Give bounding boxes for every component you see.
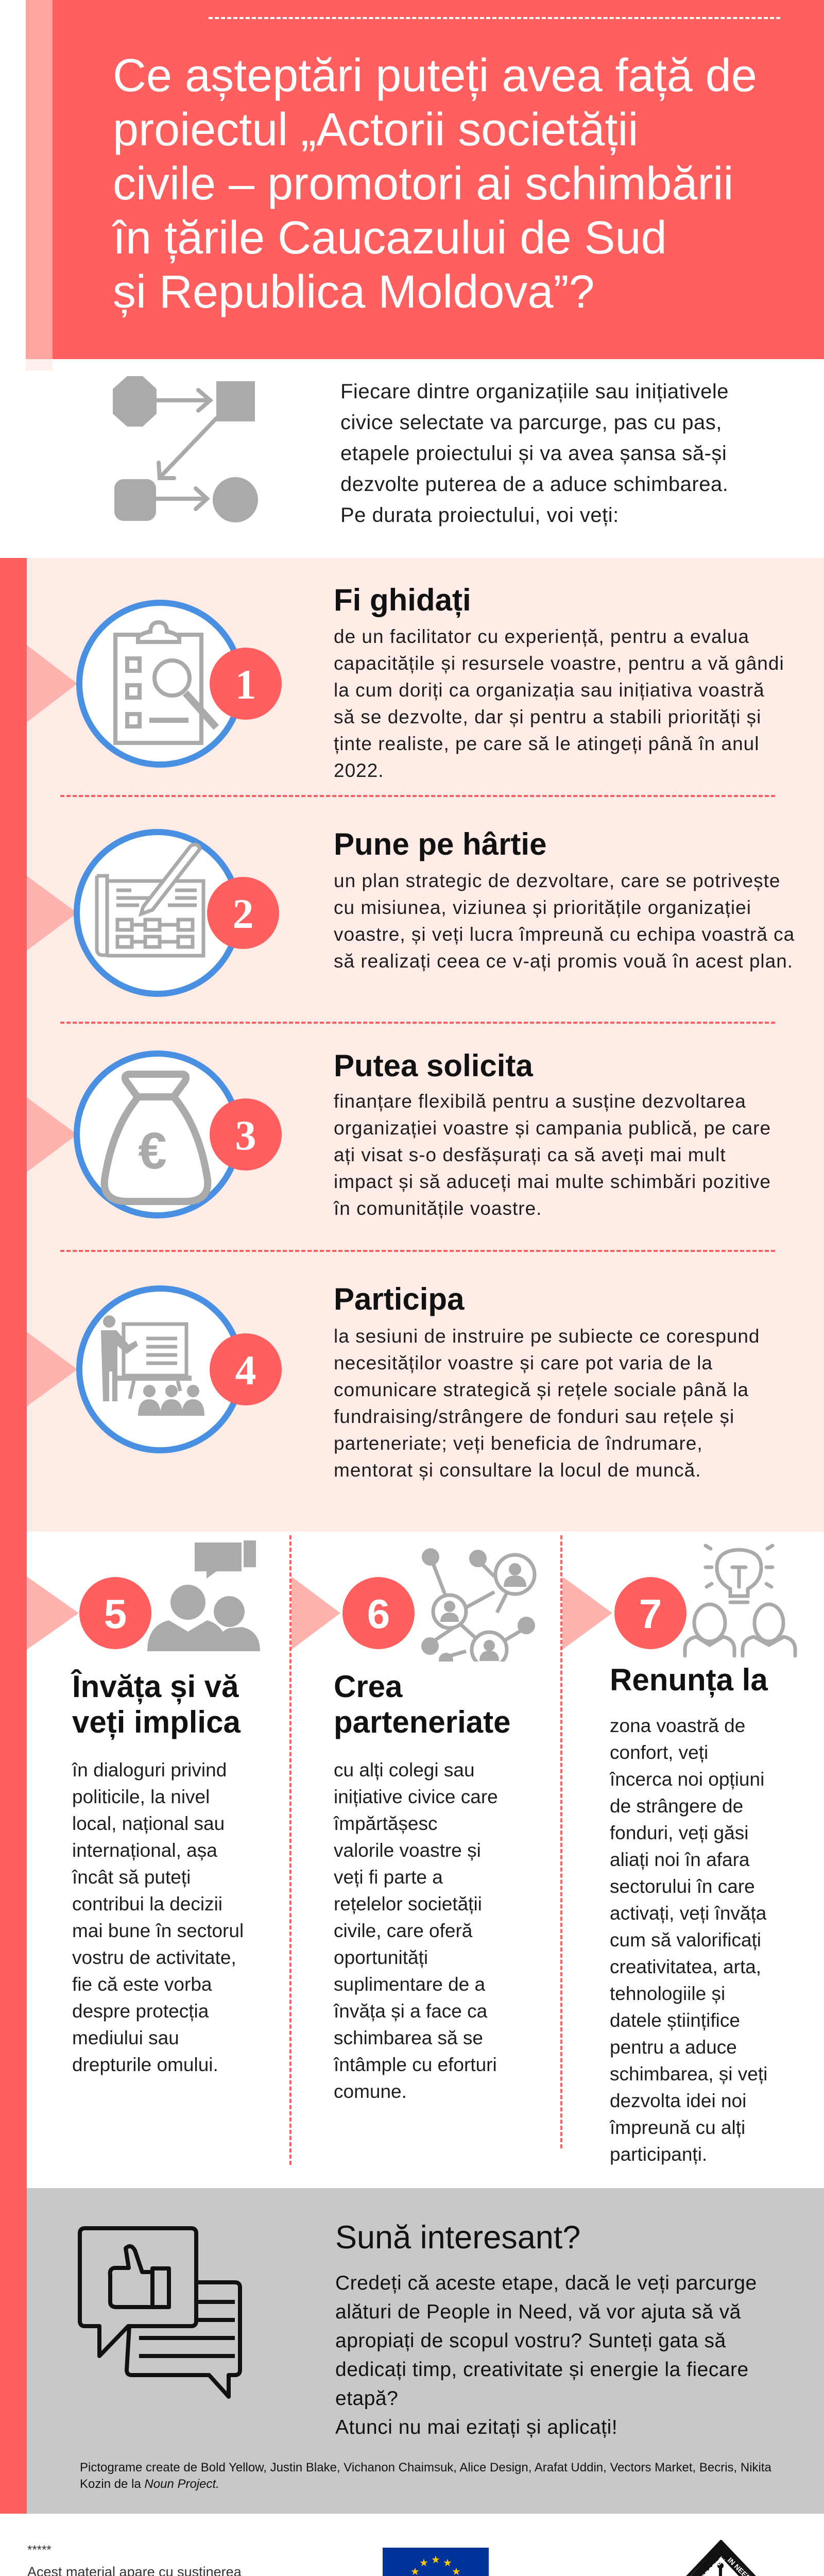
step 2 text: un plan strategic de dezvoltare, care se potrivește — [334, 870, 781, 891]
column 5 title: veți implica — [72, 1705, 241, 1739]
cta heading: Sună interesant? — [335, 2219, 580, 2256]
icon: presenter training — [27, 1285, 282, 1453]
column 6 title: Crea — [334, 1669, 402, 1704]
footer disclaimer: ***** — [27, 2543, 52, 2557]
step 4 — [27, 1282, 760, 1481]
step 3 text: organizației voastre și campania publică, pe care — [334, 1117, 771, 1139]
step 1 text: capacitățile și resursele voastre, pentru a vă gândi — [334, 653, 784, 674]
icon credits: Kozin de la Noun Project. — [80, 2477, 219, 2491]
step 2 title: Pune pe hârtie — [334, 827, 546, 861]
column 5 text: politicile, la nivel — [72, 1786, 210, 1807]
step 1 text: 2022. — [334, 760, 384, 781]
step 4 text: parteneriate; veți beneficia de îndrumare, — [334, 1433, 703, 1454]
column 7 text: activați, veți învăța — [610, 1903, 766, 1924]
step 4 text: comunicare strategică și rețele sociale până la — [334, 1379, 749, 1400]
column 6 text: cu alți colegi sau — [334, 1759, 475, 1781]
step 4 text: fundraising/strângere de fonduri sau rețele și — [334, 1406, 734, 1427]
column 7 text: cum să valorificați — [610, 1929, 761, 1951]
column 7 text — [609, 1715, 767, 2165]
column 6 text: întâmple cu eforturi — [334, 2054, 497, 2075]
icon: presenter training: 4 — [235, 1347, 256, 1394]
cta text: Atunci nu mai ezitați și aplicați! — [335, 2416, 617, 2438]
column dividers — [289, 1535, 291, 2165]
step 1 text — [334, 626, 784, 781]
title: în țările Caucazului de Sud — [113, 212, 667, 264]
column 7 text: de strângere de — [610, 1795, 743, 1817]
column 5 text: despre protecția — [72, 2001, 209, 2022]
column 6 text — [333, 1759, 498, 2102]
column 6 text: comune. — [334, 2081, 407, 2102]
cta text: alături de People in Need, vă vor ajuta să vă — [335, 2301, 741, 2323]
header dashed line — [209, 17, 780, 19]
column 5 — [27, 1540, 260, 2075]
intro text: etapele proiectului și va avea șansa să-și — [340, 442, 727, 465]
intro text: civice selectate va parcurge, pas cu pas, — [340, 411, 722, 434]
column 6 text: schimbarea să se — [334, 2027, 483, 2048]
intro text: Pe durata proiectului, voi veți: — [340, 504, 619, 527]
cta text: Credeți că aceste etape, dacă le veți parcurge — [335, 2272, 757, 2294]
logo: People in Need — [686, 2540, 756, 2576]
step 1 text: de un facilitator cu experiență, pentru a evalua — [334, 626, 749, 647]
step 3 — [27, 1048, 771, 1219]
title — [112, 50, 757, 318]
column 7 text: schimbarea, și veți — [610, 2063, 767, 2084]
title: și Republica Moldova”? — [113, 266, 594, 318]
step 3 text — [333, 1091, 771, 1219]
intro text: Fiecare dintre organizațiile sau inițiativele — [340, 380, 729, 403]
column 7 text: încerca noi opțiuni — [610, 1769, 764, 1790]
icon: clipboard with magnifier — [27, 600, 282, 768]
header red block — [53, 0, 824, 359]
column 6 text: civile, care oferă — [334, 1920, 472, 1941]
logo: EU flag — [383, 2548, 489, 2576]
column 7 text: participanți. — [610, 2144, 707, 2165]
column 5 title: Învăța și vă — [72, 1669, 239, 1704]
icon: clipboard with magnifier: 1 — [235, 661, 256, 708]
icon: money bag euro — [27, 1050, 282, 1218]
cta text: apropiați de scopul vostru? Sunteți gata să — [335, 2330, 726, 2352]
column 7 text: aliați noi în afara — [610, 1849, 750, 1870]
step 2 — [27, 827, 795, 997]
intro section — [113, 376, 729, 527]
step 4 text — [334, 1326, 760, 1481]
column 6 text: inițiative civice care — [334, 1786, 498, 1807]
column 6 text: valorile voastre și — [334, 1840, 481, 1861]
logo: EU flag: ★ — [443, 2556, 452, 2569]
column 6 title — [334, 1669, 510, 1739]
cta text: dedicați timp, creativitate și energie la fiecare — [335, 2359, 749, 2381]
column 7 text: zona voastră de — [610, 1715, 745, 1736]
icon credits — [80, 2461, 771, 2491]
step 1 — [27, 583, 784, 781]
column 7 text: sectorului în care — [610, 1876, 755, 1897]
column 7 text: împreună cu alți — [610, 2117, 745, 2138]
icon: network of people — [291, 1548, 537, 1662]
column 7 text: tehnologiile și — [610, 1983, 725, 2004]
step 2 text: să realizați ceea ce v-ați promis vouă în acest plan. — [334, 951, 793, 972]
column 7 text: confort, veți — [610, 1742, 708, 1763]
step 4 text: mentorat și consultare la locul de muncă. — [334, 1460, 701, 1481]
step 4 text: necesităților voastre și care pot varia de la — [334, 1352, 713, 1374]
step 1 title: Fi ghidați — [334, 583, 471, 617]
step 1 text: să se dezvolte, dar și pentru a stabili priorități și — [334, 706, 761, 727]
icon credits: Pictograme create de Bold Yellow, Justin Blake, Vichanon Chaimsuk, Alice Design, Arafat Uddin, Vectors Market, Becris, Nikita — [80, 2461, 771, 2475]
icon: two people talking — [27, 1540, 260, 1651]
icon: network of people: 6 — [367, 1591, 390, 1637]
step 2 text — [334, 870, 795, 972]
step 3 title: Putea solicita — [334, 1048, 533, 1083]
footer disclaimer — [27, 2543, 242, 2576]
step 3 text: impact și să aduceți mai multe schimbări pozitive — [334, 1171, 771, 1192]
column 7 text: creativitatea, arta, — [610, 1956, 761, 1977]
icon: chat bubbles with thumbs up — [78, 2226, 242, 2399]
icon: plan with pencil — [27, 829, 279, 997]
column 6 text: învăța și a face ca — [334, 2001, 487, 2022]
panel: call to action — [27, 2188, 824, 2514]
column 5 text: contribui la decizii — [72, 1893, 222, 1914]
column 7 title: Renunța la — [610, 1663, 768, 1697]
column 6 text: împărtășesc — [334, 1813, 438, 1834]
step 3 text: în comunitățile voastre. — [334, 1198, 542, 1219]
column 5 text: în dialoguri privind — [72, 1759, 227, 1781]
column 7 — [562, 1544, 797, 2165]
icon: plan with pencil: 2 — [233, 890, 253, 937]
step 1 text: ținte realiste, pe care să le atingeți până în anul — [334, 733, 759, 754]
cta text — [335, 2272, 757, 2438]
icon: process flow — [113, 376, 258, 522]
column 7 text: dezvolta idei noi — [610, 2090, 746, 2111]
column 5 text: vostru de activitate, — [72, 1947, 236, 1968]
column 6 — [291, 1548, 537, 2102]
column 5 text — [72, 1759, 244, 2075]
logo: EU flag: ★ — [431, 2553, 440, 2566]
left red bar — [0, 558, 27, 2514]
column 5 text: fie că este vorba — [72, 1974, 212, 1995]
icon: money bag euro: € — [138, 1122, 167, 1180]
column 5 text: încât să puteți — [72, 1867, 191, 1888]
column 5 title — [71, 1669, 241, 1740]
icon: two people talking: 5 — [104, 1591, 127, 1637]
intro text: dezvolte puterea de a aduce schimbarea. — [340, 473, 728, 496]
header panel — [26, 0, 824, 359]
step 2 text: voastre, și veți lucra împreună cu echipa voastră ca — [334, 924, 795, 945]
column 5 text: local, național sau — [72, 1813, 225, 1834]
header pale strip — [26, 0, 53, 359]
icon: lightbulb and people: 7 — [639, 1591, 662, 1637]
icon: lightbulb and people — [562, 1544, 797, 1658]
column 7 text: fonduri, veți găsi — [610, 1822, 748, 1843]
title: civile – promotori ai schimbării — [113, 158, 733, 210]
step 4 text: la sesiuni de instruire pe subiecte ce corespund — [334, 1326, 760, 1347]
panel: steps 1-4 — [0, 558, 824, 1532]
column 7 text: pentru a aduce — [610, 2037, 737, 2058]
column 5 text: drepturile omului. — [72, 2054, 218, 2075]
step 3 text: finanțare flexibilă pentru a susține dezvoltarea — [334, 1091, 746, 1112]
cta text: etapă? — [335, 2387, 398, 2410]
column 7 text: datele științifice — [610, 2010, 740, 2031]
column 6 text: suplimentare de a — [334, 1974, 485, 1995]
column 6 text: rețelelor societății — [334, 1893, 482, 1914]
column 6 text: veți fi parte a — [334, 1867, 443, 1888]
step 1 text: la cum doriți ca organizația sau inițiativa voastră — [334, 680, 765, 701]
step 2 text: cu misiunea, viziunea și prioritățile organizației — [334, 897, 751, 918]
icon: money bag euro: 3 — [235, 1112, 256, 1159]
column 5 text: mai bune în sectorul — [72, 1920, 244, 1941]
column 6 text: oportunități — [334, 1947, 428, 1968]
column 6 title: parteneriate — [334, 1705, 510, 1739]
column 5 text: internațional, așa — [72, 1840, 217, 1861]
step 3 text: ați visat s-o desfășurați ca să aveți mai mult — [334, 1144, 726, 1165]
logo: EU flag: ★ — [419, 2556, 428, 2569]
title: Ce așteptări puteți avea față de — [113, 50, 757, 101]
column 5 text: mediului sau — [72, 2027, 179, 2048]
intro text — [340, 380, 729, 527]
step 4 title: Participa — [334, 1282, 464, 1316]
title: proiectul „Actorii societății — [113, 104, 638, 156]
